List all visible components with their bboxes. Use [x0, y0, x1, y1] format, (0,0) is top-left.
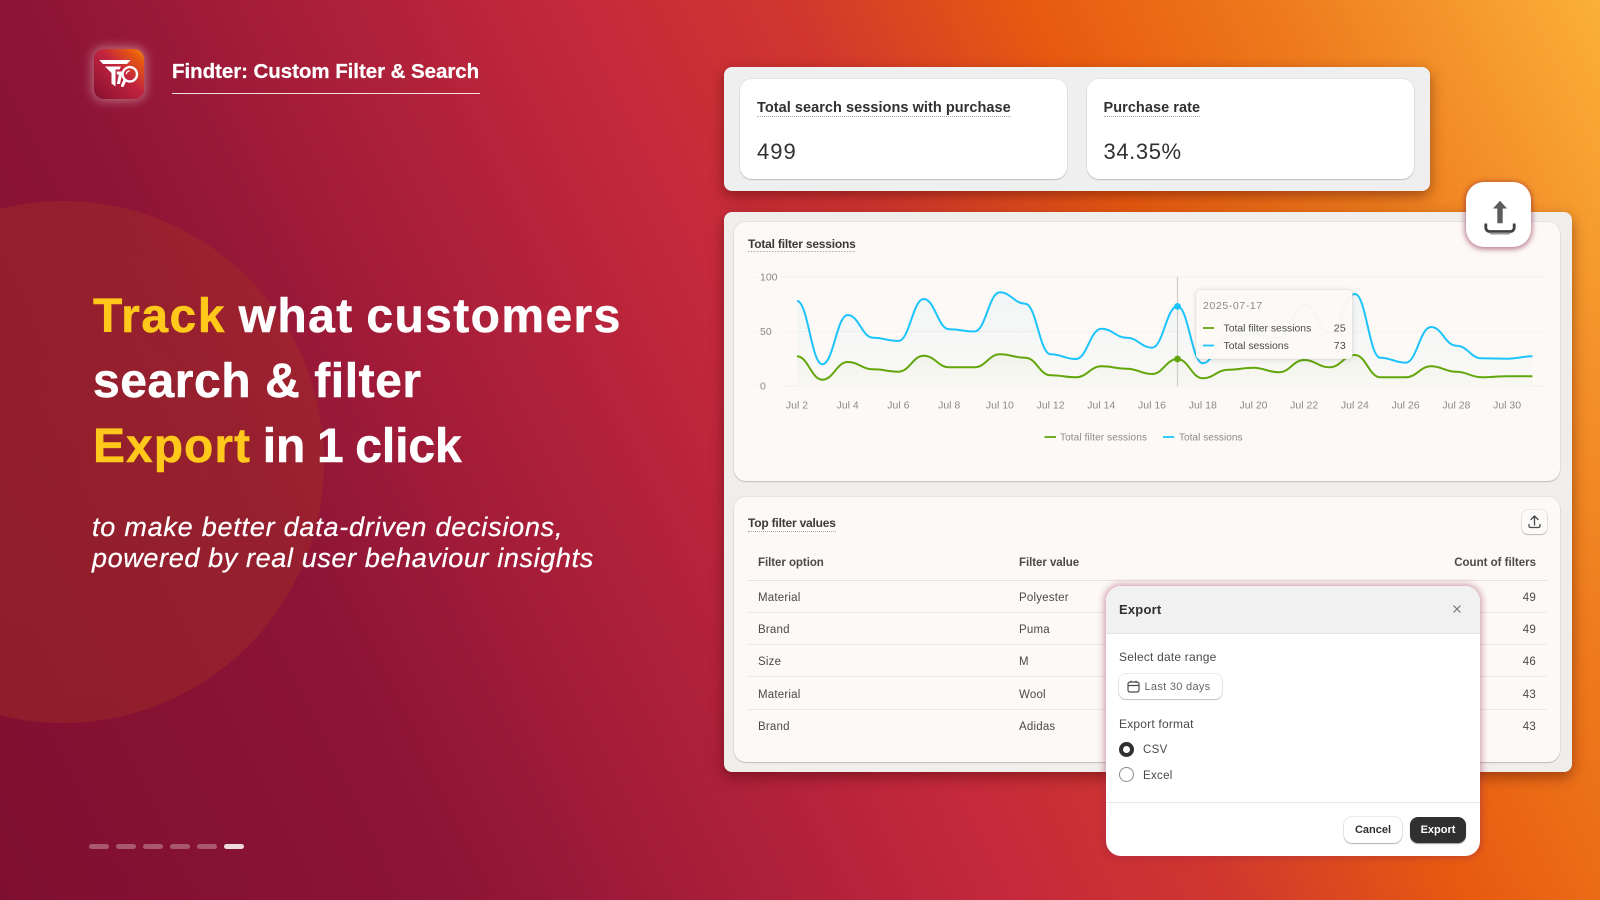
date range button — [1119, 674, 1222, 699]
table row: Material — [758, 592, 801, 604]
line chart series — [797, 277, 1532, 386]
table row — [748, 581, 1547, 613]
radio: CSV selected: CSV — [1143, 744, 1168, 756]
radio: Excel — [1119, 767, 1173, 782]
chart legend: Total sessions — [1179, 432, 1243, 444]
export button: Export — [1421, 824, 1455, 836]
chart tooltip — [1196, 290, 1352, 359]
supporting sentence — [91, 512, 594, 573]
x axis labels: Jul 4 — [837, 400, 859, 412]
chart tooltip: 73 — [1334, 340, 1346, 352]
decorative background glow circle — [0, 201, 324, 723]
slide pager — [89, 844, 244, 849]
x axis labels — [786, 400, 1521, 412]
chart tooltip: Total sessions — [1224, 341, 1289, 352]
panel: KPI cards — [724, 67, 1430, 191]
cancel button: Cancel — [1355, 824, 1391, 836]
table header — [748, 545, 1547, 581]
card: purchase rate: Purchase rate — [1104, 100, 1200, 116]
table row: 49 — [1523, 592, 1536, 604]
table row: 46 — [1523, 656, 1536, 668]
table title: Top filter values — [748, 516, 836, 530]
x axis labels: Jul 26 — [1392, 400, 1420, 412]
x axis labels: Jul 8 — [938, 400, 960, 412]
panel: analytics — [724, 212, 1572, 772]
card: purchase rate — [1087, 79, 1414, 179]
modal header — [1106, 586, 1480, 634]
x axis labels: Jul 18 — [1189, 400, 1217, 412]
y axis: 50 — [760, 326, 772, 338]
x axis labels: Jul 2 — [786, 400, 808, 412]
date range button: Last 30 days — [1144, 680, 1210, 692]
table row: Size — [758, 656, 781, 668]
card: total search sessions with purchase: 499 — [757, 139, 797, 164]
card: total search sessions with purchase — [740, 79, 1067, 179]
x axis labels: Jul 20 — [1239, 400, 1268, 412]
main headline: Track what customers — [93, 290, 622, 343]
supporting sentence: powered by real user behaviour insights — [92, 543, 594, 573]
card: purchase rate: 34.35% — [1104, 139, 1182, 164]
table row — [758, 721, 1536, 733]
table row: Wool — [1019, 688, 1046, 700]
chart title: Total filter sessions — [748, 237, 856, 251]
main headline: search & filter — [93, 355, 422, 408]
table row — [748, 613, 1547, 645]
table row: 49 — [1523, 624, 1536, 636]
table row: 43 — [1523, 688, 1536, 700]
modal header: Export — [1119, 602, 1161, 617]
cancel button — [1344, 817, 1402, 843]
app title with underline — [172, 58, 480, 94]
date range label: Select date range — [1119, 650, 1216, 664]
radio: CSV selected — [1119, 742, 1168, 757]
table row: 43 — [1523, 721, 1536, 733]
card: top filter values table — [734, 497, 1560, 762]
y axis — [748, 272, 1547, 392]
x axis labels: Jul 6 — [887, 400, 910, 412]
chart legend — [1044, 432, 1243, 444]
supporting sentence: to make better data-driven decisions, — [92, 512, 563, 542]
x axis labels: Jul 14 — [1087, 400, 1115, 412]
y axis: 0 — [760, 380, 766, 392]
table row: M — [1019, 656, 1029, 668]
main headline — [93, 290, 622, 473]
table row: Material — [758, 688, 801, 700]
main headline: Export in 1 click — [93, 420, 462, 473]
table row — [748, 645, 1547, 677]
card: total filter sessions chart — [734, 222, 1560, 481]
export format label: Export format — [1119, 717, 1194, 731]
x axis labels: Jul 16 — [1138, 400, 1166, 412]
x axis labels: Jul 22 — [1290, 400, 1318, 412]
chart tooltip: 2025-07-17 — [1203, 300, 1263, 312]
table row — [748, 678, 1547, 710]
export button — [1410, 817, 1466, 843]
table row: Brand — [758, 624, 790, 636]
y axis: 100 — [760, 272, 778, 284]
chart tooltip: 25 — [1334, 322, 1346, 334]
table header: Filter value — [1019, 557, 1079, 569]
chart tooltip: Total filter sessions — [1224, 324, 1311, 334]
x axis labels: Jul 10 — [986, 400, 1014, 412]
table header: Filter option — [758, 557, 824, 569]
card: total search sessions with purchase: Total search sessions with purchase — [757, 100, 1011, 116]
table row: Adidas — [1019, 721, 1055, 733]
x axis labels: Jul 30 — [1493, 400, 1521, 412]
small export button — [1522, 510, 1547, 534]
table header: Count of filters — [1454, 557, 1536, 569]
chart legend: Total filter sessions — [1060, 432, 1147, 444]
export modal dialog — [1106, 586, 1480, 856]
radio: Excel: Excel — [1143, 770, 1173, 782]
x axis labels: Jul 24 — [1341, 400, 1369, 412]
icon: large export button — [1466, 182, 1531, 247]
x axis labels: Jul 12 — [1037, 400, 1065, 412]
table row: Brand — [758, 721, 790, 733]
table row: Polyester — [1019, 592, 1069, 604]
app logo icon — [94, 49, 144, 99]
table row: Puma — [1019, 624, 1050, 636]
modal footer divider — [1106, 802, 1480, 803]
x axis labels: Jul 28 — [1442, 400, 1471, 412]
app title with underline: Findter: Custom Filter & Search — [172, 60, 479, 83]
